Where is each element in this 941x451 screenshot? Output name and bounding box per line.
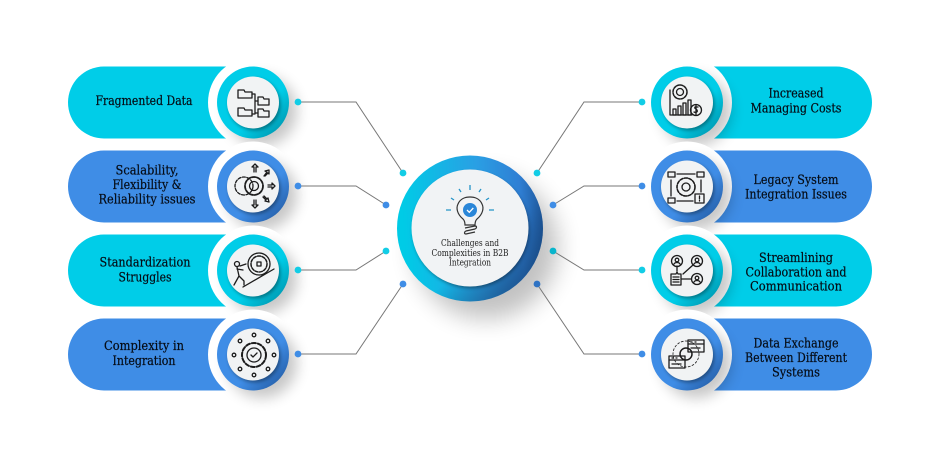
label: Standardization: [100, 256, 191, 270]
panel: Data Exchange Between Different Systems: Between Different: [745, 351, 848, 366]
icon: people and document: [671, 256, 702, 285]
label: Complexity in: [104, 339, 185, 354]
panel: Streamlining Collaboration and Communication: Collaboration and: [746, 266, 846, 280]
panel: center hub: [397, 156, 558, 319]
connector lines: [298, 102, 642, 354]
icon: person pushing gear uphill: [234, 253, 274, 287]
center title: Integration: [449, 258, 491, 268]
panel: Legacy System Integration Issues: [642, 142, 872, 232]
panel: Data Exchange Between Different Systems: [642, 310, 872, 400]
center title: Challenges and: [441, 239, 499, 249]
label: Fragmented Data: [96, 94, 193, 109]
center title: [432, 239, 508, 268]
panel: Scalability: Flexibility &: [112, 178, 182, 193]
panel: Streamlining Collaboration and Communication: Communication: [750, 280, 843, 294]
label: Legacy System: [754, 173, 838, 188]
panel: Streamlining Collaboration and Communication: [642, 226, 872, 316]
icon: legacy system network: [668, 172, 704, 203]
panel: Fragmented Data: [68, 58, 298, 148]
panel: Standardization Struggles: [68, 226, 298, 316]
icon: data exchange servers: [669, 340, 704, 368]
icon: costs chart: [670, 85, 702, 116]
panel: Complexity in Integration: [68, 310, 298, 400]
panel: Increased Managing Costs: [642, 58, 872, 148]
panel: Legacy System Integration Issues: Integration Issues: [745, 188, 847, 202]
icon: folder tree: [238, 90, 269, 117]
icon: gears with arrows: [235, 164, 275, 208]
connector dots: [295, 99, 645, 357]
panel: Scalability: Reliability issues: [98, 192, 196, 208]
panel: Scalability: [68, 142, 298, 232]
label: Increased: [768, 86, 824, 102]
panel: Standardization Struggles: Struggles: [118, 270, 172, 286]
panel: Increased Managing Costs: Managing Costs: [750, 102, 842, 116]
icon: light bulb with check: [446, 185, 494, 234]
panel: Data Exchange Between Different Systems: Systems: [772, 366, 820, 380]
label: Streamlining: [759, 251, 833, 266]
icon: gear with check and nodes: [232, 333, 276, 377]
label: Scalability,: [116, 164, 178, 178]
panel: Complexity in Integration: Integration: [112, 354, 176, 369]
center title: Complexities in B2B: [432, 249, 508, 259]
label: Data Exchange: [754, 336, 839, 352]
